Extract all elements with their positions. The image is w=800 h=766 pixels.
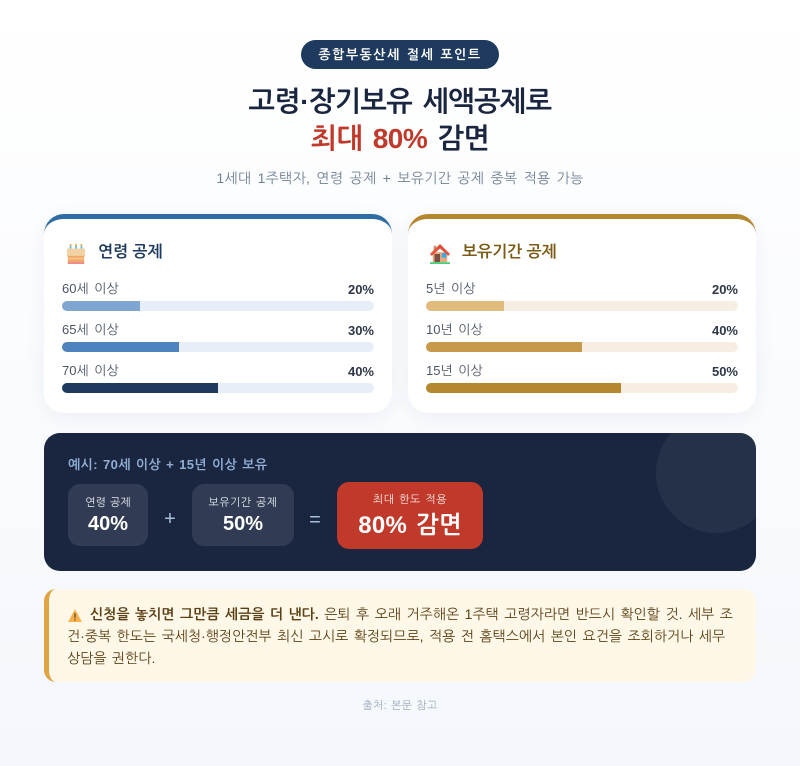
box: holding — [192, 484, 294, 546]
title — [248, 86, 552, 154]
icon: house — [430, 244, 450, 264]
callout text: 상담을 권한다. — [67, 650, 155, 666]
icon: warning triangle — [68, 609, 82, 622]
panel: worked example — [44, 433, 756, 571]
row: 65: 65세 이상 — [62, 322, 119, 337]
plus: + — [164, 508, 176, 530]
box: age — [68, 484, 148, 546]
box: result: 80% 감면 — [358, 512, 462, 539]
badge: 종합부동산세 절세 포인트 — [318, 47, 482, 62]
box: holding: 50% — [223, 513, 263, 535]
box: result — [337, 482, 483, 549]
panel: holding period deduction: 50% — [712, 364, 738, 379]
row: 60: 60세 이상 — [62, 281, 119, 296]
panel: age deduction: 40% — [348, 364, 374, 379]
source note: 출처: 본문 참고 — [362, 700, 438, 712]
title: 최대 80% 감면 — [311, 123, 489, 154]
callout text: 신청을 놓치면 그만큼 세금을 더 낸다. 은퇴 후 오래 거주해온 1주택 고령자라면 반드시 확인할 것. 세부 조 — [90, 606, 733, 622]
panel: holding period deduction: 20% — [712, 282, 738, 297]
panel: age deduction: 30% — [348, 323, 374, 338]
box: age: 연령 공제 — [85, 497, 131, 509]
subtitle: 1세대 1주택자, 연령 공제 + 보유기간 공제 중복 적용 가능 — [216, 170, 584, 186]
panel: age deduction: 20% — [348, 282, 374, 297]
example heading: 예시: 70세 이상 + 15년 이상 보유 — [68, 457, 268, 472]
icon: birthday cake — [66, 244, 86, 264]
badge — [301, 40, 499, 69]
box: holding: 보유기간 공제 — [209, 497, 277, 509]
callout: warning — [44, 589, 756, 682]
row: 15 years: 15년 이상 — [426, 363, 483, 378]
panel: age deduction — [44, 214, 392, 413]
card heading: 보유기간 공제 — [462, 244, 557, 261]
panel: holding period deduction: 40% — [712, 323, 738, 338]
box: age: 40% — [88, 513, 128, 535]
equals: = — [309, 509, 321, 531]
box: result: 최대 한도 적용 — [373, 494, 447, 506]
title: 고령·장기보유 세액공제로 — [248, 86, 552, 117]
row: 70: 70세 이상 — [62, 363, 119, 378]
callout text: 건·중복 한도는 국세청·행정안전부 최신 고시로 확정되므로, 적용 전 홈택스에서 본인 요건을 조회하거나 세무 — [67, 628, 725, 644]
panel: holding period deduction — [408, 214, 756, 413]
card heading: 연령 공제 — [98, 244, 163, 261]
row: 10 years: 10년 이상 — [426, 322, 483, 337]
row: 5 years: 5년 이상 — [426, 281, 476, 296]
callout text — [67, 606, 733, 666]
